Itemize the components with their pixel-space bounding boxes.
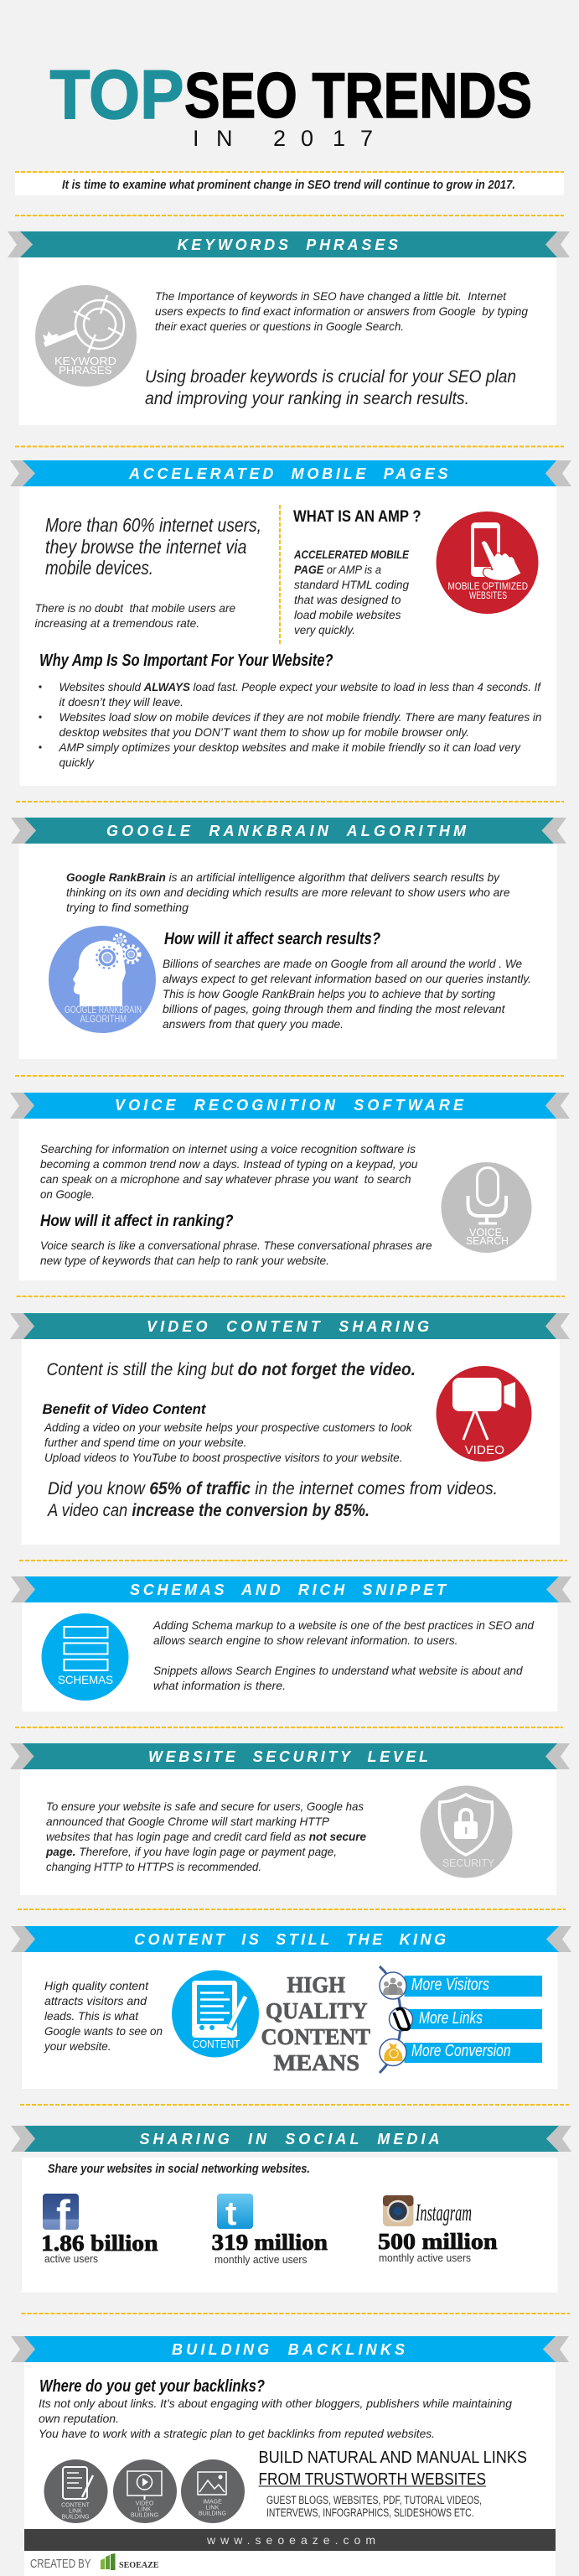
text: mobile users increasing: There is no doubt that mobile users are (35, 601, 235, 615)
section: website security level (10, 1743, 570, 1895)
icon: image link building: BUILDING (199, 2511, 226, 2517)
panel: voice recognition (18, 1119, 556, 1280)
text: mobile statistic callout: mobile devices. (45, 557, 153, 579)
heading: how will it affect in ranking: How will it affect in ranking? (40, 1213, 234, 1230)
icon: seoeaze logo (101, 2553, 116, 2570)
heading: how will it affect search results: How will it affect search results? (164, 930, 380, 948)
text: high quality content: High quality content (44, 1979, 149, 1992)
banner: building backlinks (11, 2336, 569, 2362)
text: voice search intro: Searching for information on internet using a voice recognition software is (40, 1142, 416, 1156)
icon: schemas (42, 1613, 129, 1701)
section: content is still the king (11, 1926, 571, 2089)
text: mobile statistic callout: they browse the internet via (45, 536, 246, 558)
icon: video link building: LINK (138, 2507, 152, 2512)
banner: sharing in social media: SHARING IN SOCIAL MEDIA (139, 2131, 439, 2148)
text: rankbrain definition: Google RankBrain is an artificial intelligence algorithm that delivers search results by (66, 870, 500, 884)
title: TOP (50, 55, 184, 133)
text: mobile users increasing (35, 601, 235, 630)
text: backlinks description: You have to work with a strategic plan to get backlinks from reputed websites. (39, 2427, 435, 2440)
icon: video link building: BUILDING (131, 2512, 158, 2519)
text: broader keywords callout: and improving your ranking in search results. (145, 389, 469, 408)
panel: content king (22, 1952, 558, 2089)
heading: high quality content means: HIGH (287, 1972, 345, 1997)
text: voice search intro: becoming a common trend now a days. Instead of typing on a keypad, you (40, 1157, 418, 1171)
text: security description: To ensure your website is safe and secure for users, Google has (46, 1800, 364, 1813)
text: build natural and manual links: FROM TRUSTWORTH WEBSITES (258, 2470, 486, 2489)
stat: facebook (41, 2192, 158, 2265)
icon: voice search (441, 1162, 531, 1253)
icon: google rankbrain algorithm: GOOGLE RANKBRAIN (65, 1004, 142, 1015)
panel: social media (22, 2158, 558, 2293)
text: keywords description: The Importance of keywords in SEO have changed a little bit. Internet (155, 289, 507, 303)
text: backlinks description: own reputation. (39, 2412, 119, 2425)
text: build natural and manual links: BUILD NATURAL AND MANUAL LINKS (258, 2449, 527, 2467)
text: video benefits: Upload videos to YouTube to boost prospective visitors to your website. (44, 1451, 402, 1464)
text: amp definition: PAGE or AMP is a (294, 563, 381, 576)
text: voice search ranking (40, 1239, 432, 1267)
icon: content link building: BUILDING (61, 2514, 90, 2521)
text: schema description (153, 1618, 535, 1692)
heading: high quality content means: MEANS (273, 2050, 359, 2075)
banner: keywords phrases: KEYWORDS PHRASES (178, 236, 398, 253)
banner: content is still the king: CONTENT IS STILL THE KING (134, 1931, 446, 1948)
banner: accelerated mobile pages: ACCELERATED MOBILE PAGES (128, 465, 447, 482)
icon: content link building: LINK (69, 2509, 82, 2514)
icon: video link building: VIDEO (136, 2501, 154, 2507)
icon: content link building (44, 2459, 107, 2523)
icon: video camera: VIDEO (464, 1443, 504, 1457)
text: broader keywords callout: Using broader keywords is crucial for your SEO plan (145, 367, 516, 387)
stat: facebook: active users (44, 2252, 98, 2265)
text: rankbrain explanation (163, 957, 531, 1031)
heading: high quality content means (261, 1972, 370, 2075)
icon: security (421, 1786, 513, 1878)
text: high quality content: your website. (44, 2039, 111, 2053)
text: rankbrain explanation: always expect to get relevant information based on our queries instantly. (163, 972, 531, 985)
list: amp reasons: it doesn’t they will leave. (59, 695, 184, 709)
section: keywords phrases (8, 231, 570, 425)
icon: mobile optimized websites: MOBILE OPTIMIZED (447, 580, 528, 592)
list: amp reasons: quickly (59, 756, 95, 769)
icon: keyword phrases: PHRASES (59, 364, 112, 377)
stat: instagram (378, 2195, 498, 2264)
stat: twitter (211, 2194, 328, 2266)
text: voice search ranking: new type of keywords that can help to rank your website. (40, 1254, 329, 1267)
icon: image link building: LINK (206, 2506, 220, 2511)
panel: google rankbrain (18, 844, 557, 1059)
section: building backlinks (11, 2336, 569, 2576)
banner: schemas and rich snippet: SCHEMAS AND RICH SNIPPET (130, 1581, 447, 1598)
text: voice search intro: on Google. (40, 1187, 95, 1201)
text: broader keywords callout (145, 367, 516, 408)
text: rankbrain explanation: billions of pages, going through them and finding the most relevant (163, 1002, 506, 1015)
list: content benefits (380, 1966, 542, 2073)
footer band: website url (24, 2529, 556, 2551)
icon: keyword phrases: KEYWORD (54, 355, 116, 367)
text: security description (45, 1800, 366, 1873)
text: security description: announced that Google Chrome will start marking HTTP (46, 1815, 330, 1828)
list: amp reasons (39, 680, 542, 769)
banner: building backlinks: BUILDING BACKLINKS (172, 2341, 405, 2358)
credit: created by seoeaze: SEOEAZE (119, 2560, 159, 2570)
text: mobile users increasing: increasing at a tremendous rate. (35, 616, 199, 630)
icon: voice search: VOICE (469, 1226, 502, 1239)
icon: mobile optimized websites (436, 512, 538, 614)
stat: facebook: 1.86 billion (41, 2231, 158, 2256)
section: video content sharing (10, 1313, 570, 1545)
panel: website security (20, 1769, 556, 1895)
text: amp definition: that was designed to (294, 593, 401, 606)
icon: more conversion (380, 2039, 406, 2066)
text: rankbrain definition: thinking on its own and deciding which results are more relevant to show users who are (66, 886, 510, 899)
heading: what is an amp: WHAT IS AN AMP ? (293, 508, 421, 526)
text: amp definition: load mobile websites (294, 608, 401, 621)
icon: content (172, 1971, 259, 2058)
text: content still king headline: Content is still the king but do not forget the video. (47, 1360, 416, 1379)
text: mobile statistic callout (45, 514, 261, 579)
banner: google rankbrain algorithm: GOOGLE RANKBRAIN ALGORITHM (106, 823, 467, 839)
banner: google rankbrain algorithm (11, 818, 566, 844)
section: schemas and rich snippet (11, 1576, 571, 1711)
icon: video camera (436, 1366, 531, 1462)
icon: google rankbrain algorithm (49, 926, 156, 1033)
text: schema description: Adding Schema markup to a website is one of the best practices in SEO and (153, 1618, 535, 1632)
banner: video content sharing (10, 1313, 570, 1339)
stat: instagram: 500 million (378, 2229, 498, 2254)
banner: content is still the king (11, 1926, 571, 1952)
text: schema description: Snippets allows Search Engines to understand what website is about and (153, 1664, 524, 1677)
icon: voice search: SEARCH (466, 1234, 509, 1247)
icon: keyword phrases (35, 285, 137, 387)
text: rankbrain explanation: This is how Google RankBrain helps you to achieve that by sorting (163, 987, 495, 1000)
text: build natural and manual links (258, 2449, 527, 2489)
banner: voice recognition software (10, 1093, 570, 1119)
list: content benefits: More Visitors (411, 1976, 489, 1994)
text: amp definition: standard HTML coding (294, 578, 409, 591)
text: video statistics callout: Did you know 65% of traffic in the internet comes from videos. (48, 1479, 498, 1498)
text: link sources: GUEST BLOGS, WEBSITES, PDF, TUTORAL VIDEOS, (266, 2494, 482, 2506)
list: amp reasons: desktop websites that you DON’T want them to show up for mobile browser only. (59, 725, 469, 739)
stat: twitter: t (225, 2195, 236, 2232)
banner: website security level (10, 1743, 570, 1769)
icon: more links (389, 2007, 412, 2031)
icon: image link building (181, 2459, 245, 2523)
icon: content link building: CONTENT (61, 2502, 90, 2509)
text: backlinks description: Its not only about links. It’s about engaging with other bloggers, publishers while maintaining (39, 2397, 512, 2410)
text: video statistics callout (46, 1479, 498, 1520)
stat: instagram: Instagram (415, 2200, 472, 2226)
banner: schemas and rich snippet (11, 1576, 571, 1602)
icon: mobile optimized websites: WEBSITES (469, 589, 507, 601)
icon: schemas: SCHEMAS (58, 1673, 113, 1686)
icon: content: CONTENT (193, 2038, 240, 2050)
text: high quality content: leads. This is what (44, 2009, 139, 2023)
intro text band (15, 173, 564, 195)
icon: google rankbrain algorithm: ALGORITHM (80, 1013, 127, 1025)
text: security description: websites that has login page and credit card field as not secure (46, 1830, 366, 1843)
section: voice recognition software (10, 1093, 570, 1280)
text: video benefits (44, 1420, 412, 1464)
text: rankbrain definition: trying to find something (66, 901, 189, 914)
text: high quality content (44, 1979, 163, 2053)
heading: where do you get your backlinks: Where do you get your backlinks? (39, 2377, 265, 2396)
text: amp definition (293, 548, 410, 636)
title: IN 2017 (193, 126, 373, 151)
list: content benefits: More Conversion (411, 2042, 511, 2060)
panel: building backlinks (24, 2362, 556, 2576)
text: keywords description (155, 289, 528, 333)
title (50, 55, 532, 151)
text: high quality content: Google wants to see on (44, 2024, 163, 2038)
section: google rankbrain (11, 818, 566, 1059)
list: amp reasons: Websites load slow on mobile devices if they are not mobile friendly. There are many features in (59, 710, 542, 724)
section: sharing in social media (11, 2126, 571, 2293)
heading: high quality content means: CONTENT (261, 2024, 370, 2049)
text: voice search intro: can speak on a microphone and say whatever phrase you want to search (40, 1172, 411, 1186)
banner: voice recognition software: VOICE RECOGNITION SOFTWARE (115, 1097, 464, 1114)
banner: keywords phrases (8, 231, 570, 257)
text: keywords description: users expects to find exact information or answers from Google by typing (155, 304, 528, 318)
text: schema description: allows search engine to show relevant information. to users. (153, 1633, 458, 1647)
text: link sources (266, 2494, 482, 2519)
text: mobile statistic callout: More than 60% internet users, (45, 514, 261, 536)
text: video benefits: Adding a video on your website helps your prospective customers to look (44, 1420, 412, 1434)
text: high quality content: attracts visitors and (44, 1994, 147, 2007)
text: share your websites: Share your websites in social networking websites. (48, 2162, 310, 2176)
banner: accelerated mobile pages (10, 460, 571, 486)
text: link sources: INTERVEWS, INFOGRAPHICS, SLIDESHOWS ETC. (266, 2506, 474, 2519)
panel: keywords phrases (18, 257, 556, 425)
text: amp definition: ACCELERATED MOBILE (293, 548, 410, 561)
icon: video link building (113, 2459, 177, 2523)
icon: more visitors (380, 1972, 406, 1999)
text: voice search intro (40, 1142, 418, 1201)
text: security description: changing HTTP to HTTPS is recommended. (46, 1860, 261, 1873)
stat: twitter: 319 million (211, 2230, 328, 2255)
footer band: website url: www.seoeaze.com (206, 2533, 375, 2547)
icon: image link building: IMAGE (203, 2499, 222, 2506)
heading: why amp is important: Why Amp Is So Important For Your Website? (39, 652, 333, 670)
panel: accelerated mobile pages (20, 486, 556, 786)
credit: created by seoeaze: CREATED BY (30, 2557, 90, 2571)
stat: facebook: f (56, 2192, 70, 2239)
text: security description: page. Therefore, if you have login page or payment page, (45, 1845, 337, 1858)
text: amp definition: very quickly. (294, 623, 355, 636)
panel: video content (22, 1339, 560, 1545)
text: keywords description: their exact queries or questions in Google Search. (155, 319, 404, 333)
heading: high quality content means: QUALITY (266, 1998, 367, 2023)
heading: benefit of video content: Benefit of Video Content (42, 1401, 207, 1417)
section: accelerated mobile pages (10, 460, 571, 786)
panel: schemas (22, 1602, 558, 1711)
icon: security: SECURITY (442, 1857, 494, 1869)
text: voice search ranking: Voice search is like a conversational phrase. These conversational phrases are (40, 1239, 432, 1252)
stat: twitter: monthly active users (215, 2253, 308, 2266)
list: amp reasons: Websites should ALWAYS load fast. People expect your website to load in less than 4 seconds. If (59, 680, 542, 693)
list: amp reasons: AMP simply optimizes your desktop websites and make it mobile friendly so it can load very (59, 740, 521, 754)
text: schema description: what information is there. (153, 1679, 286, 1692)
banner: website security level: WEBSITE SECURITY LEVEL (148, 1748, 428, 1765)
banner: video content sharing: VIDEO CONTENT SHARING (147, 1318, 429, 1335)
banner: sharing in social media (11, 2126, 571, 2152)
text: rankbrain explanation: answers from that query you made. (163, 1017, 344, 1031)
text: video statistics callout: A video can increase the conversion by 85%. (46, 1501, 370, 1520)
list: content benefits: More Links (419, 2009, 483, 2028)
stat: instagram: monthly active users (379, 2251, 471, 2264)
text: backlinks description (39, 2397, 512, 2440)
text: rankbrain definition (66, 870, 510, 914)
text: video benefits: further and spend time on your website. (44, 1436, 246, 1449)
credit: created by seoeaze (30, 2553, 159, 2571)
text: rankbrain explanation: Billions of searches are made on Google from all around the world . We (163, 957, 522, 970)
intro text band: It is time to examine what prominent change in SEO trend will continue to grow in 2017. (62, 178, 515, 192)
